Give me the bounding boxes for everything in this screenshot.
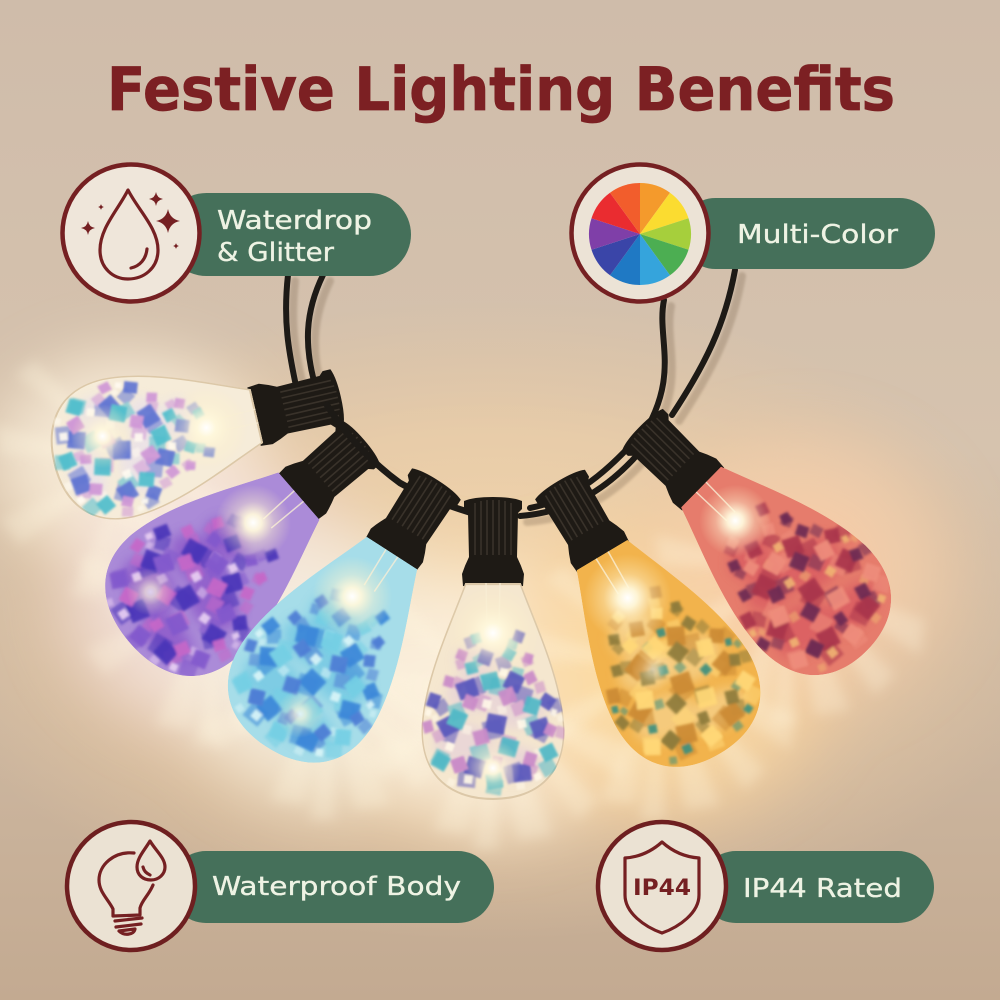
badge: Waterdrop & Glitter: [62, 164, 411, 302]
pill: Waterdrop & Glitter: & Glitter: [217, 238, 334, 268]
bulb: clear glitter left: [50, 369, 344, 520]
bulb: purple: [105, 421, 380, 676]
pill: Waterdrop & Glitter: [165, 193, 411, 276]
icon: colour wheel: [572, 164, 708, 302]
icon: waterdrop and sparkles: [62, 164, 200, 302]
bulb: orange: [535, 470, 760, 767]
title: Festive Lighting Benefits: [107, 55, 895, 125]
pill: Waterproof Body: [170, 851, 494, 923]
pill: IP44 Rated: [700, 851, 934, 923]
light glow and rays on wall: [0, 325, 985, 865]
icon: bulb with droplet: [67, 822, 195, 950]
pill: Waterproof Body: Waterproof Body: [212, 872, 461, 902]
bulb: red: [622, 408, 891, 675]
pill: IP44 Rated: IP44 Rated: [743, 874, 902, 904]
main cable over sockets: [327, 405, 475, 514]
pill: Multi-Color: Multi-Color: [737, 220, 898, 250]
badge: Multi-Color: [572, 164, 935, 302]
bulb: blue: [228, 468, 461, 763]
badge: IP44 Rated: [598, 822, 934, 950]
pill: Multi-Color: [680, 198, 935, 269]
cables: [286, 270, 742, 522]
pill: Waterdrop & Glitter: Waterdrop: [217, 206, 372, 236]
bulb: clear glitter centre: [421, 497, 567, 800]
icon: IP44 shield: IP44: [633, 876, 691, 901]
icon: IP44 shield: [598, 822, 726, 950]
badge: Waterproof Body: [67, 822, 494, 950]
